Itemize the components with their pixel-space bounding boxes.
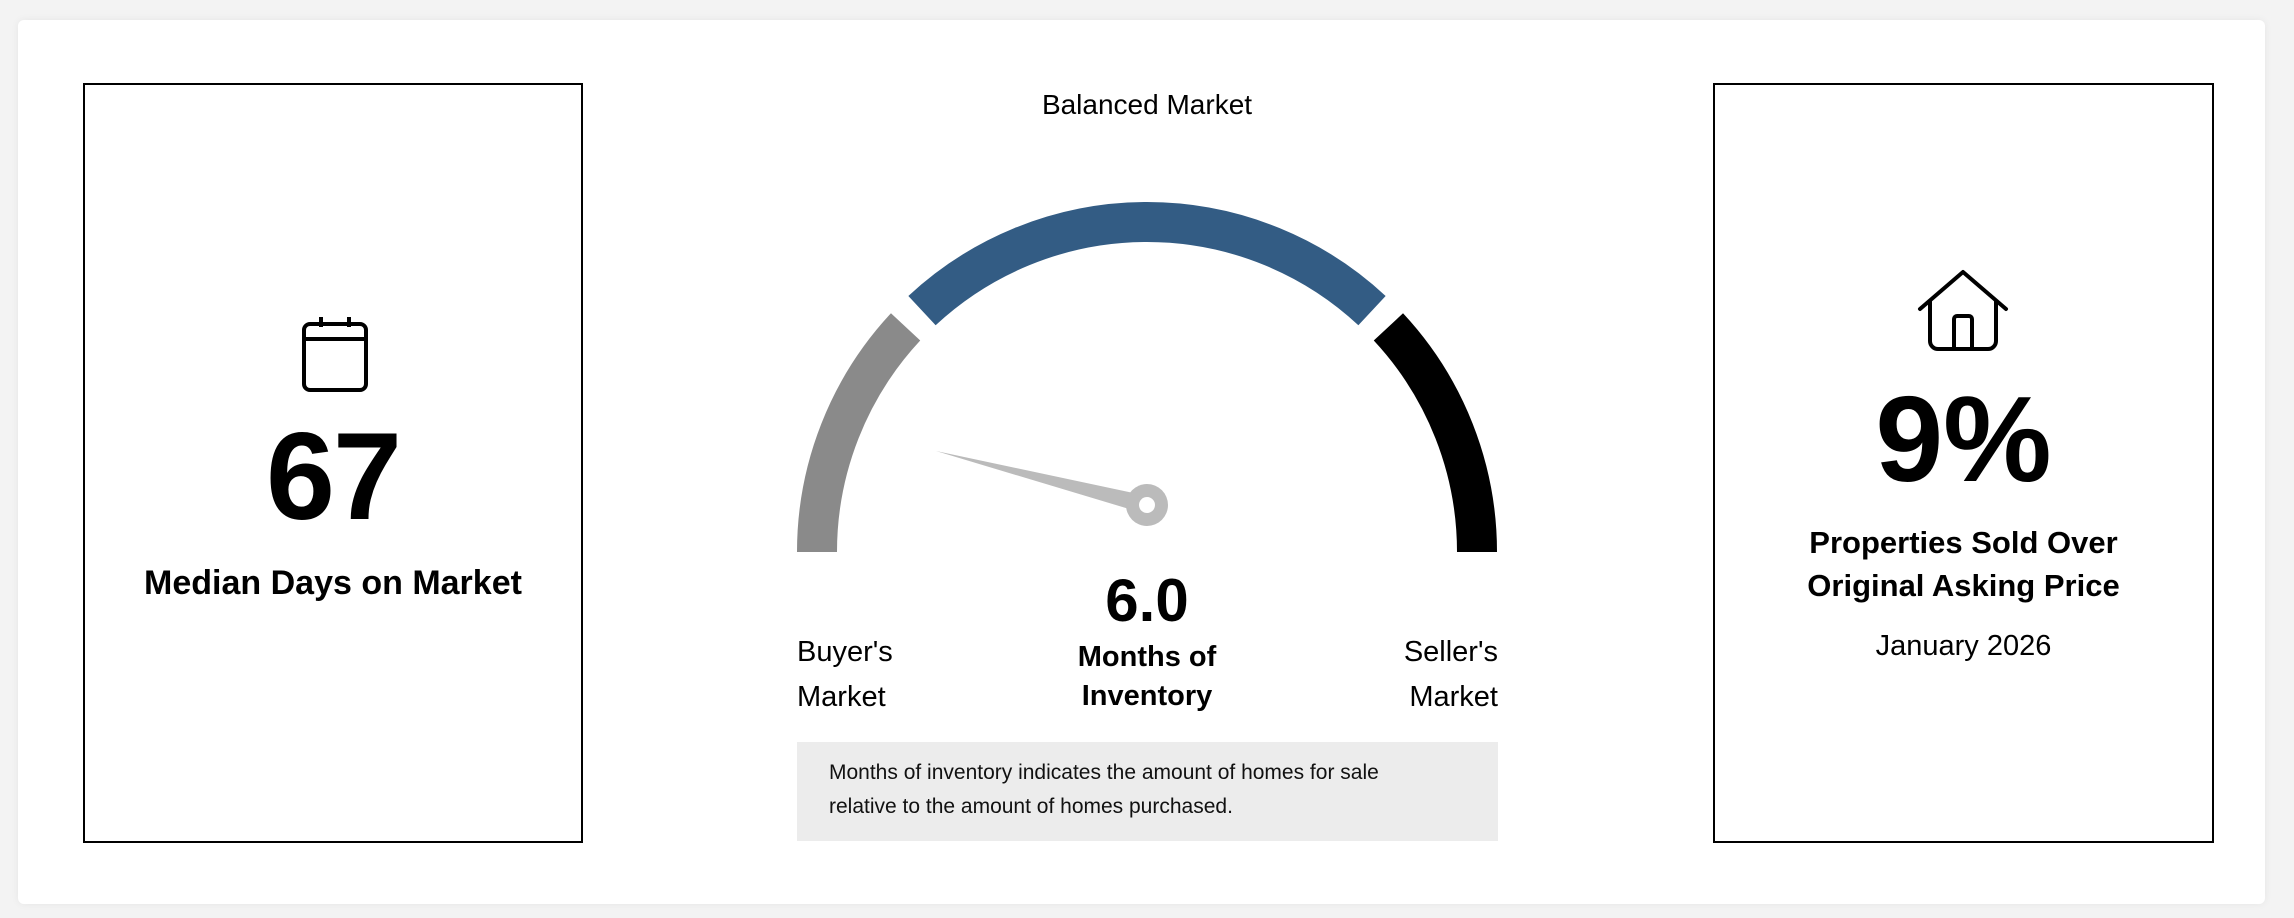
gauge segment: balanced: [922, 222, 1372, 311]
number: 9%: 9%: [1875, 371, 2052, 507]
label: properties sold over original asking price: Properties Sold Over: [1809, 525, 2118, 560]
needle: [936, 451, 1168, 526]
icon: house: [1918, 270, 2008, 351]
gauge segment: buyer's: [817, 327, 906, 552]
label: properties sold over original asking price: Original Asking Price: [1807, 568, 2120, 603]
label: buyer's market: [797, 636, 893, 713]
value: 6.0: 6.0: [1105, 567, 1189, 634]
label: months of inventory: Months of: [1078, 641, 1216, 673]
label: buyer's market: Buyer's: [797, 636, 893, 668]
icon: calendar: [302, 317, 368, 392]
label: months of inventory: Inventory: [1082, 680, 1212, 712]
info box: Months of inventory indicates the amount of homes for sale relative to the amount of homes purchased.: [829, 761, 1379, 818]
label: seller's market: [1404, 636, 1498, 713]
gauge segment: seller's: [1388, 327, 1477, 552]
label: buyer's market: Market: [797, 681, 886, 713]
label: seller's market: Seller's: [1404, 636, 1498, 668]
label: months of inventory: [1078, 641, 1216, 712]
panel: properties sold over asking: [1713, 83, 2214, 843]
title: balanced market: Balanced Market: [1042, 89, 1252, 120]
number: 67: 67: [266, 408, 400, 546]
label: seller's market: Market: [1409, 681, 1498, 713]
date: January 2026: [1876, 630, 2051, 662]
info box: [797, 742, 1498, 841]
label: median days on market: Median Days on Market: [144, 564, 522, 602]
panel: median days on market: [83, 83, 583, 843]
label: properties sold over original asking price: [1807, 525, 2120, 603]
